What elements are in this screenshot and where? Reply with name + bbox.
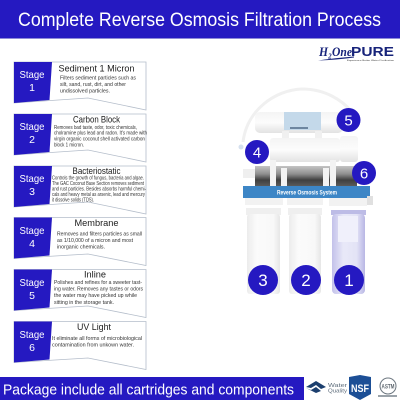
blue system label xyxy=(243,186,370,198)
panel: stage 3: Bacteriostatic xyxy=(72,166,121,177)
panel: stage 5: Stage xyxy=(20,277,45,289)
panel: stage 3: and rust particles. Besides absorbs harmful chemi- xyxy=(52,186,146,192)
panel: stage 1: 1 xyxy=(29,82,35,94)
brand logo: H2One Pure: PURE xyxy=(351,45,394,59)
certification logo: NSF xyxy=(349,375,371,400)
brand logo: H2One Pure: Experience Better Water Purification xyxy=(347,59,394,62)
panel: stage 4: Membrane xyxy=(74,218,118,229)
number badge 6 xyxy=(352,161,376,185)
panel: stage 2: Carbon Block xyxy=(73,114,120,126)
panel: stage 5: the water may have picked up while xyxy=(54,293,137,299)
certification logo: ASTM xyxy=(378,378,397,397)
filter housing 2 xyxy=(288,208,322,294)
panel: stage 6: 6 xyxy=(29,342,35,354)
panel: stage 3: it dissolve solids (TDS). xyxy=(52,198,94,204)
panel: stage 5 xyxy=(14,270,146,318)
certification logo: Water Quality xyxy=(306,381,347,394)
number badge 4 xyxy=(245,140,269,164)
panel: stage 1: Stage xyxy=(20,69,45,81)
brand logo: H2One Pure: H₂One xyxy=(318,44,352,59)
panel: stage 6: It eliminate all forms of microbiological xyxy=(52,336,142,342)
filter housing 3 xyxy=(246,208,281,294)
number badge 5 xyxy=(336,108,360,132)
panel: stage 6 xyxy=(14,322,146,370)
brand logo: H2One Pure xyxy=(318,44,394,62)
UV steel chamber xyxy=(243,160,357,186)
panel: stage 1: undissolved particles. xyxy=(60,88,110,94)
footer banner: Package include all cartridges and components xyxy=(3,382,294,398)
inline filter xyxy=(255,112,343,133)
number badge 6: 6 xyxy=(360,166,368,182)
number badge 2 xyxy=(291,265,321,295)
panel: stage 1 xyxy=(14,62,146,110)
panel: stage 3: Controls the growth of fungus, bacteria and algae. xyxy=(52,176,144,182)
panel: stage 2: Stage xyxy=(20,121,45,133)
panel: stage 2: cholramine plus lead and radon. It's made with xyxy=(54,130,147,136)
clear filter housing 1 xyxy=(331,210,366,294)
panel: stage 5: Polishes and refines for a sweeter tast- xyxy=(54,280,142,286)
panel: stage 2: 2 xyxy=(29,134,35,146)
panel: stage 2: virgin organic coconut shell activated carbon xyxy=(54,136,145,142)
tubing loop xyxy=(243,89,352,142)
panel: stage 1: Filters sediment particles such as xyxy=(60,76,136,82)
panel: stage 1: silt, sand, rust, dirt, and other xyxy=(60,82,126,88)
certification logo: Water Quality: Quality xyxy=(328,388,347,394)
panel: stage 4: as 1/10,000 of a micron and most xyxy=(57,238,134,244)
panel: stage 6: Stage xyxy=(20,329,45,341)
number badge 4: 4 xyxy=(253,144,261,162)
number badge 1 xyxy=(334,265,364,295)
certification logo: Water Quality: Water xyxy=(328,383,347,389)
panel: stage 3: 3 xyxy=(29,186,35,198)
title banner xyxy=(0,0,400,39)
product photo: reverse osmosis system xyxy=(238,89,373,294)
panel: stage 3: The GAC Coconut Base Section removes sediment xyxy=(52,181,144,187)
certification logo: NSF: NSF xyxy=(351,383,369,395)
panel: stage 3: cals and heavy metal as arsenic, lead and mercury xyxy=(52,192,145,198)
panel: stage 5: sitting in the storage tank. xyxy=(54,300,114,306)
panel: stage 1: Sediment 1 Micron xyxy=(58,64,134,74)
panel: stage 4: 4 xyxy=(29,238,35,250)
panel: stage 6: UV Light xyxy=(77,322,111,333)
number badge 1: 1 xyxy=(344,271,354,290)
number badge 3: 3 xyxy=(258,271,268,290)
panel: stage 4: Stage xyxy=(20,225,45,237)
panel: stage 5: 5 xyxy=(29,290,35,302)
number badge 3 xyxy=(248,265,278,295)
panel: stage 5: ing water. Removes any tastes or odors xyxy=(54,286,143,292)
panel: stage 6: contamination from unkown water. xyxy=(52,342,134,348)
manifold bracket xyxy=(245,196,373,206)
panel: stage 3 xyxy=(14,166,146,214)
panel: stage 2 xyxy=(14,114,147,162)
panel: stage 4 xyxy=(14,218,146,266)
panel: stage 3: Stage xyxy=(20,173,45,185)
blue system label: Reverse Osmosis System xyxy=(277,190,337,196)
number badge 2: 2 xyxy=(301,271,311,290)
panel: stage 5: Inline xyxy=(84,270,106,280)
panel: stage 2: Removes bad taste, odor, toxic chemicals, xyxy=(54,125,137,131)
panel: stage 4: inorganic chemicals. xyxy=(57,244,105,250)
membrane housing xyxy=(238,131,358,162)
panel: stage 4: Removes and filters particles as small xyxy=(57,232,142,238)
certification logo: ASTM: ASTM xyxy=(382,384,394,390)
number badge 5: 5 xyxy=(344,112,353,130)
panel: stage 2: block 1 micron. xyxy=(54,142,84,148)
